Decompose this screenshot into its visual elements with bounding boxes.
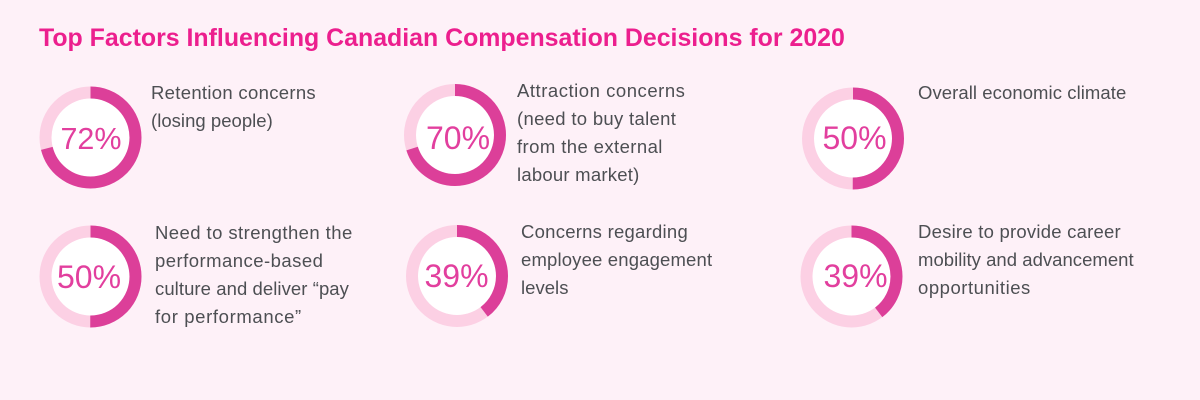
donut: 39% career: 39% bbox=[823, 258, 888, 294]
donut: 50% bbox=[808, 94, 898, 184]
text: engagement bbox=[521, 221, 712, 298]
donut: 50% performance: 50% bbox=[57, 259, 121, 295]
text: economic climate: Overall economic climate bbox=[918, 82, 1126, 103]
text: engagement: levels bbox=[521, 277, 568, 298]
text: career mobility: mobility and advancement bbox=[918, 249, 1134, 270]
text: attraction bbox=[517, 80, 685, 185]
donut: 70% bbox=[410, 90, 500, 180]
text: retention: (losing people) bbox=[151, 110, 273, 131]
text: retention: Retention concerns bbox=[151, 82, 316, 103]
donut: 50% performance bbox=[46, 232, 136, 322]
text: attraction: (need to buy talent bbox=[517, 108, 676, 129]
title: Top Factors Influencing Canadian Compensation Decisions for 2020 bbox=[39, 24, 845, 52]
donut: 39% engagement: 39% bbox=[424, 258, 489, 294]
donut: 39% career bbox=[806, 232, 896, 322]
text: attraction: from the external bbox=[517, 136, 663, 157]
text: performance culture: performance-based bbox=[155, 250, 323, 271]
donut: 70%: 70% bbox=[426, 120, 490, 156]
text: career mobility: Desire to provide career bbox=[918, 221, 1121, 242]
text: attraction: labour market) bbox=[517, 164, 640, 185]
donut: 72% bbox=[46, 92, 136, 182]
text: career mobility bbox=[918, 221, 1134, 298]
text: attraction: Attraction concerns bbox=[517, 80, 685, 101]
text: engagement: Concerns regarding bbox=[521, 221, 688, 242]
donut: 39% engagement bbox=[412, 231, 502, 321]
text: performance culture: culture and deliver “pay bbox=[155, 278, 349, 299]
donut: 72%: 72% bbox=[60, 122, 122, 156]
donut: 50%: 50% bbox=[822, 120, 887, 156]
text: performance culture: Need to strengthen the bbox=[155, 222, 353, 243]
text: career mobility: opportunities bbox=[918, 277, 1031, 298]
text: retention bbox=[151, 82, 316, 131]
text: performance culture: for performance” bbox=[155, 306, 302, 327]
text: performance culture bbox=[155, 222, 353, 327]
text: engagement: employee engagement bbox=[521, 249, 712, 270]
